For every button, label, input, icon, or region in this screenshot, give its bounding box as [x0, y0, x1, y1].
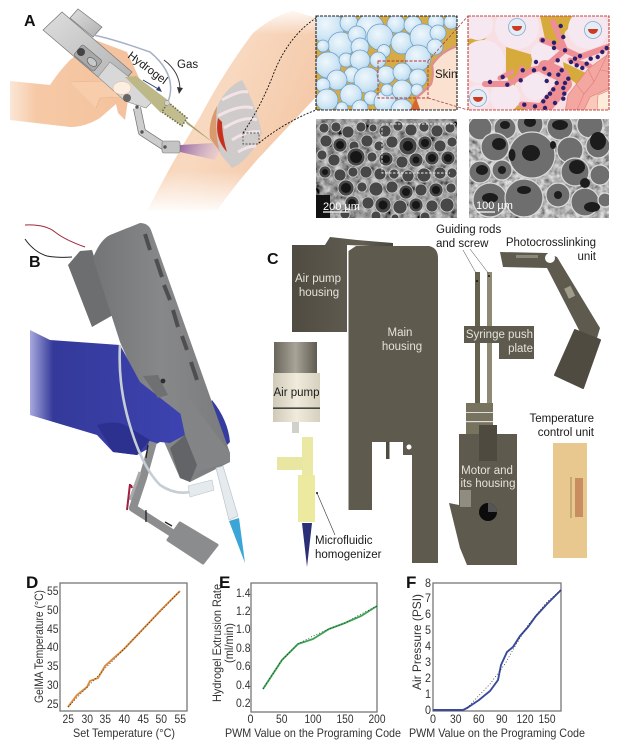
- temperature control unit: Temperature: [529, 413, 594, 425]
- x axis tick labels: [248, 712, 386, 726]
- extrusion curve: [263, 606, 377, 689]
- main housing part: housing: [382, 341, 422, 353]
- panel letter E: E: [219, 573, 230, 592]
- panel letter C: C: [267, 251, 279, 268]
- tube connector: [188, 466, 238, 520]
- wires: [25, 225, 85, 257]
- light cylinder: [168, 523, 217, 563]
- skin region: [412, 45, 457, 110]
- y axis tick labels: 5: [425, 623, 431, 637]
- x axis title: PWM Value on the Programing Code: [225, 726, 401, 740]
- x axis tick labels: 60: [473, 712, 485, 726]
- air pump housing part: housing: [299, 287, 339, 299]
- plot frame: [433, 583, 561, 711]
- pale pores: [468, 16, 608, 110]
- lower fingers shading: [97, 422, 150, 455]
- schematic: cells and crosslinked gel: [467, 16, 610, 110]
- panel F: air pressure chart: [406, 573, 585, 740]
- photocrosslinking unit: Photocrosslinking: [506, 237, 596, 249]
- arm illustration: [148, 11, 316, 210]
- y axis tick labels: 2: [425, 671, 431, 685]
- front body panels and screw: [143, 375, 230, 482]
- y axis tick labels: 6: [425, 607, 431, 621]
- y axis tick labels: 4: [425, 639, 431, 653]
- y axis tick labels: 1.0: [236, 622, 251, 636]
- light beam: [180, 143, 220, 160]
- x axis tick labels: 200: [368, 712, 386, 726]
- air tube: [120, 345, 213, 493]
- x axis tick labels: 30: [82, 712, 93, 726]
- y axis tick labels: 0.8: [236, 641, 251, 655]
- x axis tick labels: 45: [138, 712, 149, 726]
- air pump housing part: Air pump: [295, 273, 341, 285]
- temperature control unit: control unit: [538, 427, 595, 439]
- x axis tick labels: [62, 712, 186, 726]
- y axis tick labels: 50: [47, 603, 59, 617]
- pink tissue strands: [485, 22, 608, 107]
- wound with hydrogel patch: [210, 80, 262, 168]
- embedded cells: [470, 18, 602, 106]
- gas label and arrow: [164, 59, 198, 94]
- y axis tick labels: 0.4: [236, 678, 251, 692]
- x axis tick labels: 120: [516, 712, 534, 726]
- x axis tick labels: [430, 712, 556, 726]
- x axis title: PWM Value on the Programing Code: [409, 726, 585, 740]
- vent slots: [145, 234, 197, 380]
- scale label left: 200 µm: [323, 201, 360, 213]
- y axis tick labels: 35: [47, 659, 59, 673]
- x axis tick labels: 40: [118, 712, 130, 726]
- main body of device: [93, 223, 230, 482]
- y axis tick labels: 7: [425, 591, 431, 605]
- temperature control unit: [529, 413, 595, 558]
- x axis tick labels: 55: [174, 712, 186, 726]
- pressure curve: [433, 590, 561, 710]
- x axis tick labels: 50: [156, 712, 167, 726]
- y axis tick labels: 1: [425, 687, 431, 701]
- motor and its housing: its housing: [461, 478, 515, 490]
- main housing part: [348, 246, 438, 563]
- zoom callout dashed lines: [243, 18, 316, 144]
- y axis tick labels: 0: [425, 703, 431, 717]
- red callout lines: [428, 16, 468, 110]
- x axis tick labels: 90: [496, 712, 508, 726]
- photocrosslinking unit: [500, 237, 600, 388]
- guiding rods and screw: and screw: [436, 238, 489, 250]
- air pump housing part: [292, 237, 393, 332]
- guiding rods and screw: Guiding rods: [436, 224, 501, 236]
- syringe push plate: Syringe push: [466, 329, 533, 341]
- y axis tick labels: 0.6: [236, 659, 251, 673]
- air pump housing: [68, 250, 113, 327]
- syringe push plate: plate: [508, 343, 533, 355]
- x axis tick labels: 150: [538, 712, 556, 726]
- gold gel patches: [468, 16, 590, 110]
- x axis tick labels: 30: [450, 712, 462, 726]
- x axis tick labels: 150: [336, 712, 354, 726]
- scale label right: 100 µm: [476, 200, 513, 212]
- x axis tick labels: 50: [276, 712, 288, 726]
- panel letter D: D: [26, 573, 38, 592]
- air pump part: [273, 342, 320, 433]
- panel A: device applied to arm: [10, 5, 612, 222]
- y axis unit: (ml/min): [222, 623, 236, 663]
- dark particles: [488, 24, 609, 110]
- y axis tick labels: 8: [425, 576, 431, 590]
- y axis title: GelMA Temperature (°C): [32, 590, 46, 703]
- gas label and arrow: Gas: [177, 59, 198, 71]
- blue tip: [229, 518, 245, 563]
- glove behind body: [205, 400, 230, 450]
- y axis tick labels: [425, 576, 431, 717]
- panel letter F: F: [406, 573, 416, 592]
- schematic: bubbles in hydrogel on skin: [315, 16, 458, 110]
- dashed region in micrograph: [382, 124, 456, 173]
- x axis tick labels: 35: [100, 712, 111, 726]
- y axis tick labels: 1.4: [236, 586, 251, 600]
- y axis tick labels: [47, 584, 59, 711]
- skin label: Skin: [435, 69, 457, 81]
- microfluidic homogenizer part: Microfluidic: [315, 535, 373, 547]
- panel D: GelMA temperature chart: [26, 573, 187, 740]
- main housing part: Main: [388, 327, 412, 339]
- panel letter B: B: [29, 254, 41, 271]
- skin cells: [565, 46, 609, 110]
- x axis tick labels: 25: [62, 712, 74, 726]
- panel letter A: A: [24, 13, 36, 30]
- hydrogel label and arrow: Hydrogel: [125, 50, 169, 87]
- y axis tick labels: 40: [47, 640, 59, 654]
- y axis tick labels: 0.2: [236, 696, 251, 710]
- plot frame: [251, 583, 377, 712]
- y axis tick labels: 30: [47, 678, 59, 692]
- x axis tick labels: 0: [430, 712, 436, 726]
- microfluidic homogenizer part: homogenizer: [315, 549, 382, 561]
- panel B: photograph of device in gloved hand: [25, 223, 245, 563]
- micrograph left with scale bar: [316, 119, 457, 222]
- motor and its housing: [449, 403, 517, 565]
- y axis tick labels: 55: [47, 584, 59, 598]
- y axis title: Hydrogel Extrusion Rate: [210, 584, 224, 702]
- articulated light arm: [127, 442, 172, 533]
- selection rectangle: [378, 61, 428, 98]
- x axis title: Set Temperature (°C): [73, 726, 175, 740]
- photocrosslinking unit: unit: [577, 251, 597, 263]
- plot frame: [60, 583, 187, 711]
- x axis tick labels: 0: [248, 712, 254, 726]
- air pump part: Air pump: [274, 387, 320, 399]
- y axis title: Air Pressure (PSI): [410, 594, 424, 690]
- guiding rods and screw: [436, 224, 501, 405]
- motor and its housing: Motor and: [461, 465, 513, 477]
- panel C: exploded device parts: [267, 224, 600, 567]
- temperature curve: [68, 591, 180, 707]
- y axis tick labels: 25: [47, 697, 59, 711]
- glove hand: [30, 330, 185, 455]
- y axis tick labels: [236, 586, 251, 710]
- y axis tick labels: 45: [47, 622, 59, 636]
- x axis tick labels: 100: [304, 712, 322, 726]
- syringe push plate: [464, 326, 534, 359]
- micrograph right with scale bar: [469, 119, 609, 218]
- y axis tick labels: 3: [425, 655, 431, 669]
- y axis tick labels: 1.2: [236, 604, 251, 618]
- panel E: hydrogel extrusion rate chart: [210, 573, 401, 740]
- handheld device illustration: [43, 9, 215, 153]
- hand: [10, 40, 140, 127]
- microfluidic homogenizer part: [277, 437, 382, 567]
